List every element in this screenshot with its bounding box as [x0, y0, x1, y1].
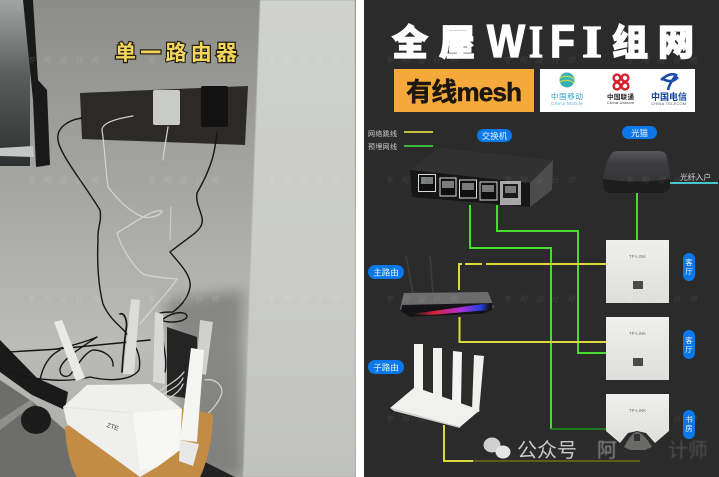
heading: single router: 单一路由器: [115, 42, 237, 65]
badge: wired mesh: 有线mesh: [406, 77, 522, 107]
label: living room 1: 客: [685, 257, 693, 267]
watermark text: left photo: 专阿设计师: [147, 176, 221, 185]
cables: green embedded lines: [470, 193, 637, 429]
watermark: wechat account: 计师: [668, 439, 708, 462]
label: study: 书: [685, 414, 693, 424]
label: sub router: 子路由: [373, 362, 399, 372]
label: fibre input: 光纤入户: [680, 172, 711, 182]
divider between panels: [356, 0, 364, 477]
title: I: [529, 16, 543, 67]
label: living room 2: 厅: [685, 345, 693, 354]
label: living room 1: [683, 253, 695, 281]
label: switch: 交换机: [482, 131, 508, 141]
legend: 网络跳线: [368, 129, 397, 138]
title: 全: [392, 22, 428, 63]
watermark text: diagram: 专阿设计师: [503, 176, 577, 185]
watermark text: diagram: 专阿设计师: [385, 295, 459, 304]
label: living room 2: 客: [685, 335, 693, 345]
watermark text: diagram: 专阿设计师: [625, 415, 699, 424]
label: sub router: [368, 360, 404, 374]
device: wall panel AP 3: [606, 394, 669, 450]
title: F: [550, 15, 575, 67]
logo: China Mobile: China Mobile: [551, 101, 583, 107]
device: optical modem: [603, 151, 670, 193]
watermark: wechat account: [484, 438, 708, 462]
label: main router: [368, 265, 404, 279]
brand mark: ZTE: [106, 422, 120, 433]
watermark text: diagram: 专阿设计师: [503, 56, 577, 65]
legend: 预埋网线: [368, 142, 397, 151]
label: optical modem: [622, 126, 657, 139]
logo: China Unicom: [607, 75, 635, 105]
black power adapter: [201, 86, 228, 127]
label: study: 房: [685, 423, 693, 433]
logo: China Telecom: 中国电信: [651, 91, 687, 102]
logo: China Unicom: China Unicom: [607, 100, 635, 105]
watermark text: left photo: 专阿设计师: [27, 295, 101, 304]
dark box behind router: [167, 327, 197, 400]
label: living room 1: 厅: [685, 267, 693, 276]
label: main router: 主路由: [373, 268, 399, 278]
black furniture leg: [0, 340, 68, 410]
label: study: [683, 410, 695, 439]
label: optical modem: 光猫: [631, 128, 648, 138]
white router with antennas: [54, 299, 213, 477]
device: main router: [400, 256, 494, 317]
logo: China Mobile: [551, 72, 584, 107]
rear antennas: [123, 299, 140, 374]
label: living room 2: [683, 330, 695, 359]
watermark text: diagram: 专阿设计师: [385, 56, 459, 65]
white cables: [90, 116, 222, 418]
watermark text: left photo: 专阿设计师: [147, 56, 221, 65]
router body: [63, 384, 182, 477]
watermark: wechat account: 阿: [597, 439, 617, 462]
lighter side wall: [243, 0, 355, 477]
logo: China Telecom: [651, 74, 687, 106]
watermark text: left photo: 专阿设计师: [27, 176, 101, 185]
device: wall panel AP 2: TP-LINK: [629, 331, 646, 336]
watermark text: diagram: 专阿设计师: [625, 56, 699, 65]
logo: China Mobile: 中国移动: [551, 91, 584, 101]
panel: whole-home wifi diagram: [364, 0, 719, 477]
front right antenna: [180, 348, 204, 442]
logo: China Telecom: CHINA TELECOM: [651, 102, 686, 106]
logo: China Unicom: 中国联通: [607, 92, 634, 101]
title: 组: [612, 22, 648, 63]
television edge: [0, 0, 50, 167]
device: wall panel AP 1: TP-LINK: [629, 254, 646, 259]
watermark text: diagram: 专阿设计师: [385, 176, 459, 185]
legend: [368, 129, 433, 151]
title: I: [582, 16, 602, 67]
watermark text: left photo: 专阿设计师: [267, 295, 341, 304]
floor: [0, 380, 78, 477]
device: wall panel AP 2: [606, 317, 669, 380]
watermark text: left photo: 专阿设计师: [267, 176, 341, 185]
title: 网: [658, 22, 694, 63]
title: 屋: [439, 22, 475, 63]
panel: left photo of single router: [0, 0, 356, 477]
carrier logos: [540, 69, 695, 112]
wood stool: [65, 400, 213, 477]
watermark text: left photo: [27, 56, 341, 304]
watermark text: diagram: 专阿设计师: [503, 295, 577, 304]
title: W: [487, 15, 526, 67]
badge: wired mesh: [394, 69, 534, 112]
watermark text: diagram: 专阿设计师: [625, 176, 699, 185]
device: wall panel AP 1: [606, 240, 669, 303]
watermark: wechat account: 公众号: [517, 439, 577, 462]
watermark text: left photo: 专阿设计师: [147, 295, 221, 304]
device: network switch: [410, 148, 553, 207]
watermark text: diagram: [385, 56, 699, 424]
black cables: [7, 118, 217, 380]
device: sub router: [390, 344, 484, 428]
title: [392, 15, 694, 67]
watermark text: diagram: 专阿设计师: [625, 295, 699, 304]
front left antenna: [54, 320, 85, 381]
device: wall panel AP 3: TP-LINK: [629, 408, 646, 413]
white power adapter: [153, 90, 180, 125]
watermark text: left photo: 专阿设计师: [27, 56, 101, 65]
wall socket panel: [80, 86, 248, 145]
cables: yellow jumper lines: [444, 264, 640, 461]
watermark text: left photo: 专阿设计师: [267, 56, 341, 65]
cable: fibre input: [670, 182, 718, 184]
icon: wechat bubbles: [484, 438, 510, 458]
watermark text: diagram: 专阿设计师: [385, 415, 459, 424]
label: switch: [477, 129, 512, 142]
baseboard: [200, 462, 235, 477]
